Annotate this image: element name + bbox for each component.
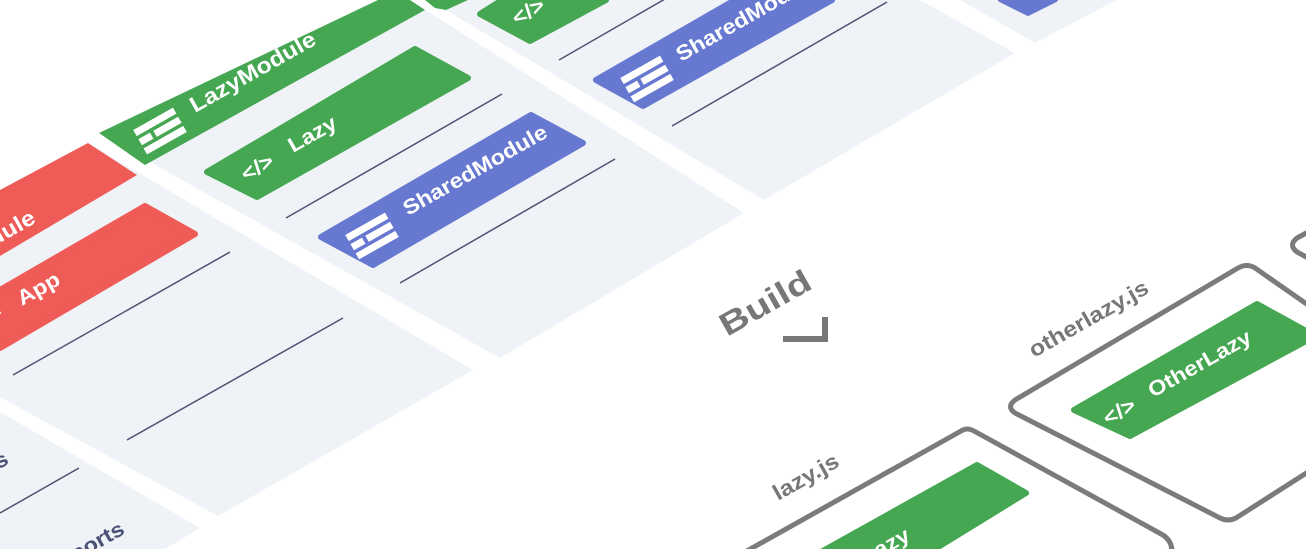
output file: otherlazy.js: otherlazy.js	[1024, 275, 1153, 362]
output file: otherlazy.js: OtherLazy	[1144, 325, 1256, 402]
panel: LazyModule: Lazy	[284, 111, 341, 157]
panel: LazyModule	[99, 0, 744, 358]
output file: partial box right	[1292, 232, 1306, 258]
output file: otherlazy.js	[1010, 266, 1306, 520]
item: SharedModule import	[596, 0, 832, 106]
arrow: build	[783, 317, 828, 342]
item: OtherLazy component	[480, 0, 606, 41]
item: SharedModule import	[321, 115, 583, 265]
panel: LazyModule: </>	[237, 149, 278, 186]
icon: module	[133, 108, 187, 154]
output file: otherlazy.js: </>	[1099, 393, 1140, 430]
output file: lazy.js: lazy.js	[768, 448, 843, 505]
item: Lazy component	[207, 49, 468, 197]
header: AppModule	[0, 143, 137, 256]
output file: lazy.js	[745, 429, 1172, 549]
item: App component	[0, 206, 195, 348]
panel: LazyModule: SharedModule	[399, 120, 551, 220]
panel: LazyModule: LazyModule	[185, 26, 320, 117]
panel: top-right module	[960, 0, 1116, 43]
panel: AppModule	[0, 143, 473, 516]
heading: Build: Build	[713, 262, 817, 343]
panel: exports module (left)	[0, 412, 200, 549]
panel: OtherLazyModule	[425, 0, 1015, 200]
header: LazyModule	[99, 0, 425, 165]
panel: AppModule: App	[13, 267, 64, 310]
